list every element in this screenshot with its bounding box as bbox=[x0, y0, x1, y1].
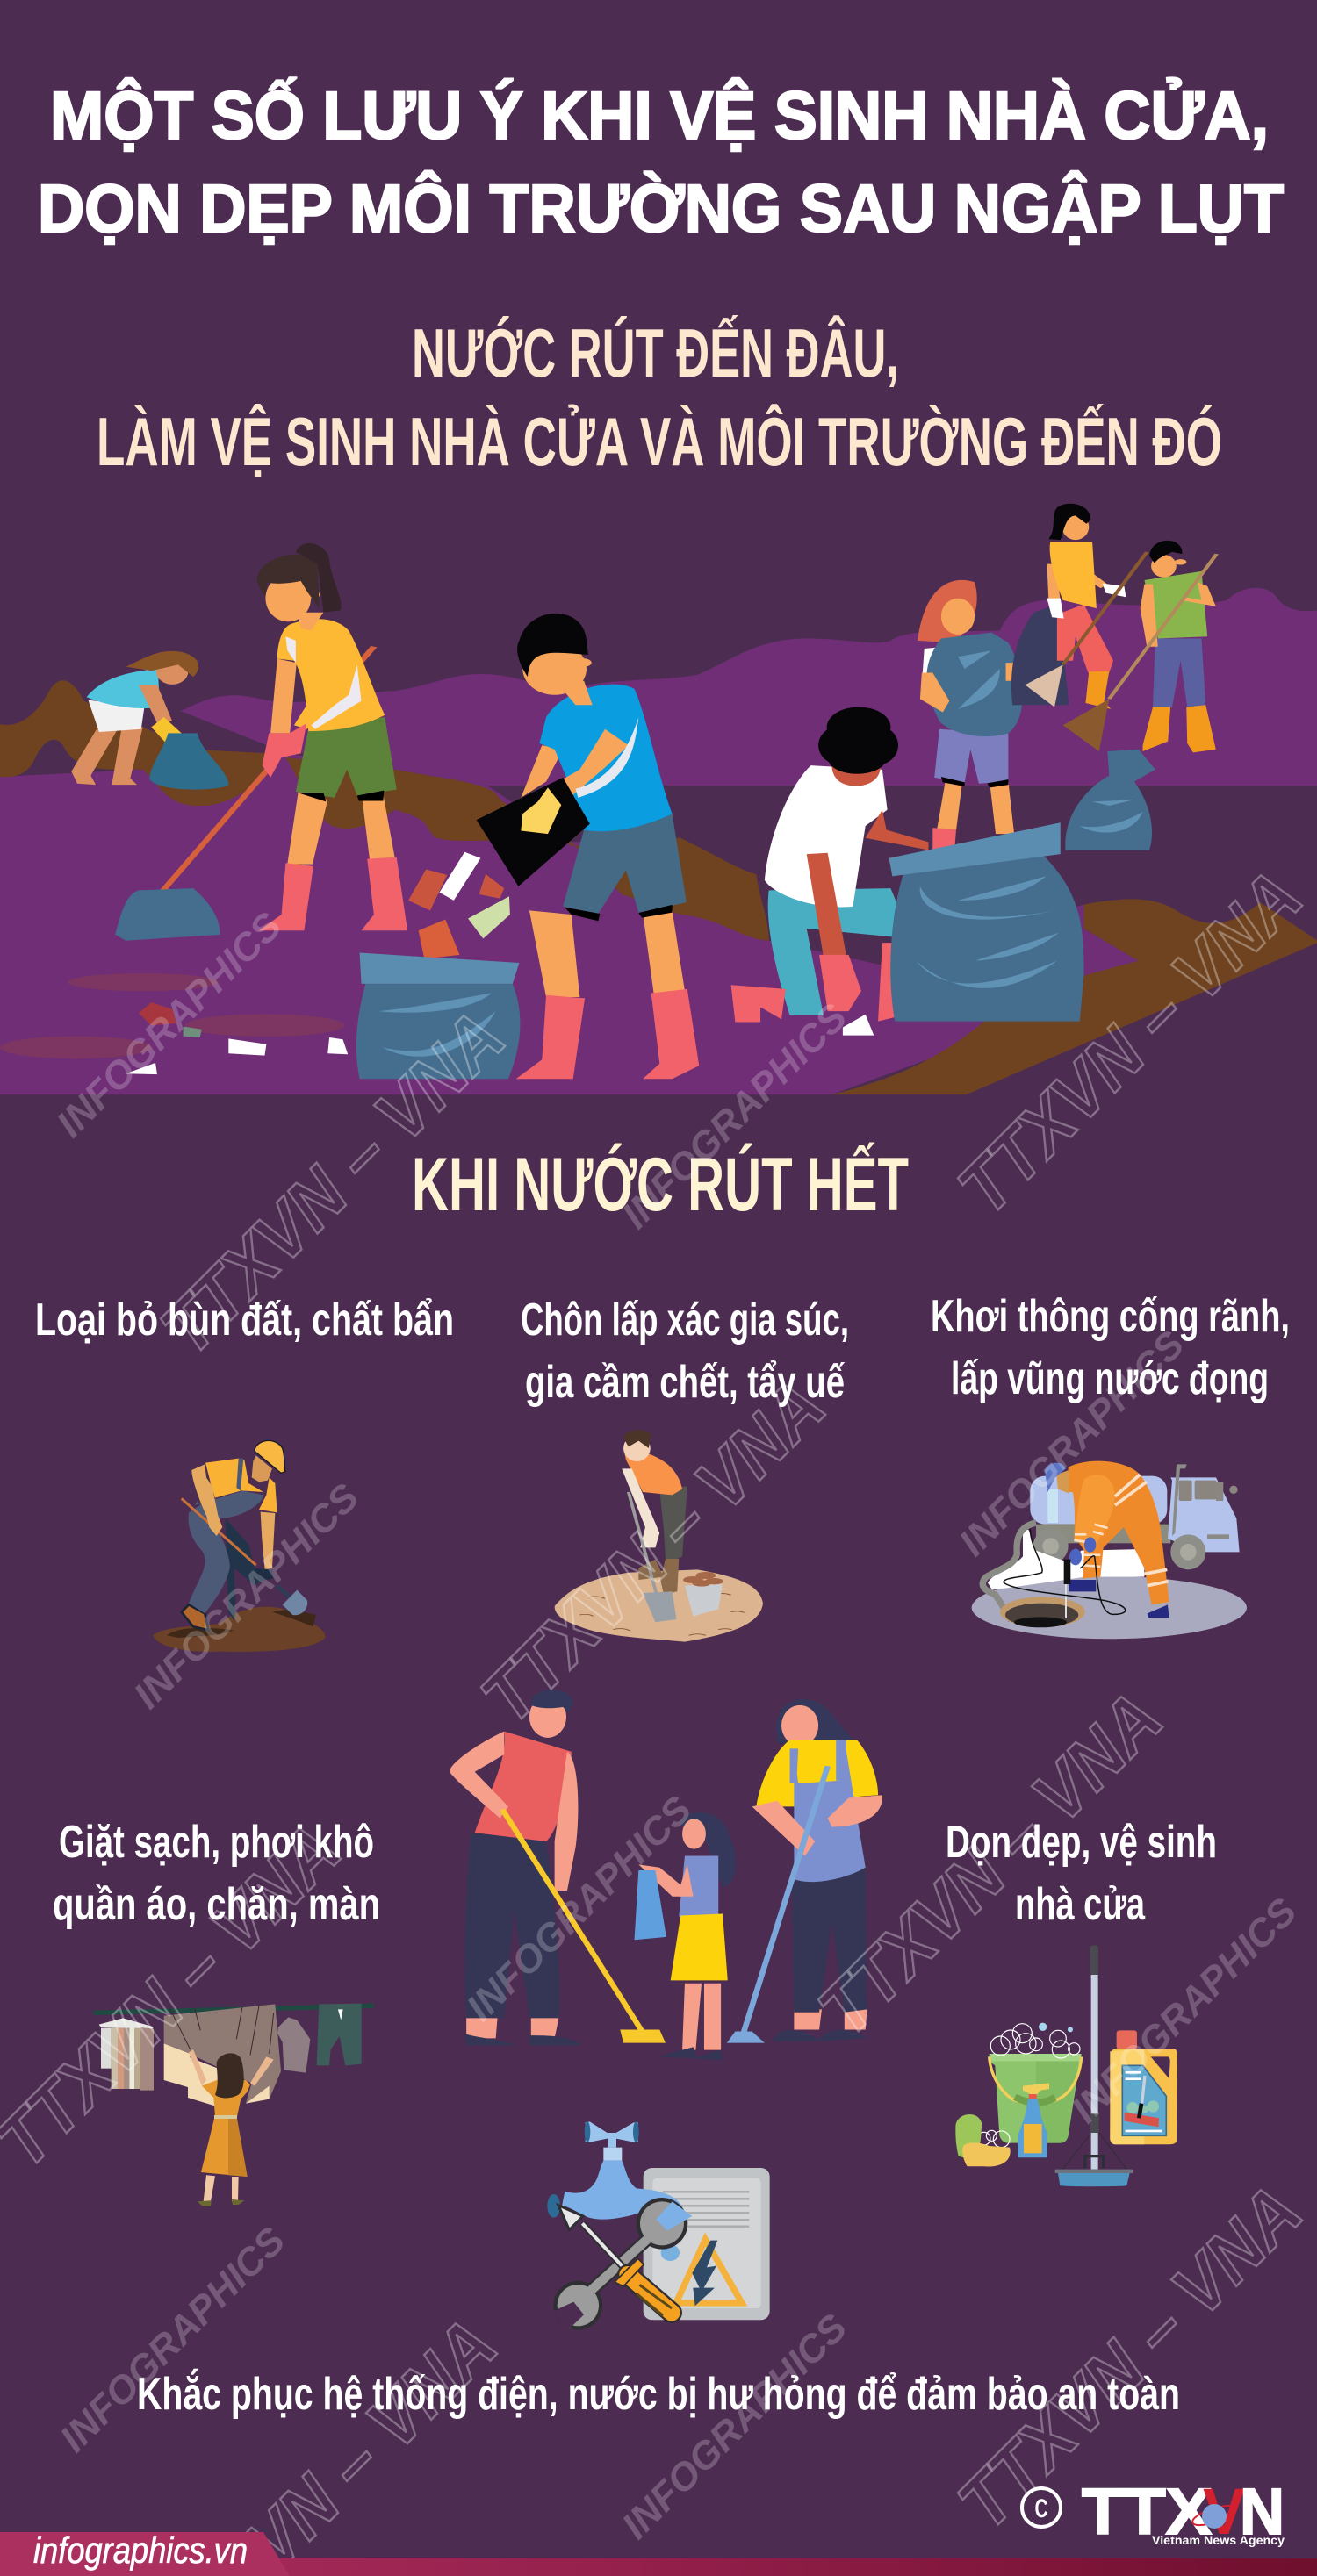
icon: woman hanging laundry bbox=[94, 2004, 374, 2206]
puddles and litter bbox=[0, 973, 348, 1074]
woman in orange shirt, red hair, holding bag bbox=[918, 580, 1023, 850]
item text: wash and dry clothes: Giặt sạch, phơi khô bbox=[59, 1817, 374, 1868]
logo: TTXVN: Vietnam News Agency bbox=[1152, 2533, 1285, 2547]
icon: water tap, wrench, screwdriver and electrical panel bbox=[547, 2121, 770, 2332]
man with mop bbox=[450, 1690, 666, 2045]
far-left child with bag bbox=[71, 651, 228, 790]
mud patches bbox=[0, 680, 1317, 1094]
purple hills bbox=[181, 588, 1317, 786]
subtitle bbox=[97, 314, 1222, 480]
logo: TTXVN: V bbox=[1203, 2475, 1245, 2548]
woman with mop bbox=[727, 1699, 882, 2043]
item text: tidy the house bbox=[946, 1817, 1217, 1930]
logo: TTXVN: TTX bbox=[1082, 2475, 1212, 2548]
watermarks: INFOGRAPHICS bbox=[126, 1475, 367, 1717]
footer website: infographics.vn bbox=[33, 2529, 248, 2571]
item text: bury dead animals: gia cầm chết, tẩy uế bbox=[525, 1357, 845, 1408]
illustration: people cleaning up after the flood bbox=[0, 504, 1317, 1094]
man in green shirt sweeping bbox=[1063, 541, 1217, 752]
watermarks: agency name: TTXVN – VNA bbox=[145, 995, 520, 1370]
icon: worker digging bbox=[153, 1440, 326, 1652]
heading: when water has fully receded: KHI NƯỚC RÚT HẾT bbox=[412, 1143, 909, 1227]
subtitle: NƯỚC RÚT ĐẾN ĐÂU, bbox=[412, 314, 899, 391]
ground bbox=[0, 753, 1139, 1094]
rubbish bag, open bbox=[356, 953, 520, 1079]
copyright symbol bbox=[1022, 2488, 1061, 2527]
girl with cloth bbox=[635, 1812, 737, 2060]
logo: TTXVN: N bbox=[1240, 2475, 1285, 2548]
icon: family cleaning the house bbox=[450, 1690, 882, 2060]
footer strip bbox=[0, 2532, 1317, 2576]
watermarks bbox=[48, 904, 1305, 2547]
icon: worker clearing a manhole beside a truck bbox=[972, 1461, 1247, 1639]
watermarks: INFOGRAPHICS bbox=[458, 1788, 700, 2029]
icon: cleaning supplies bbox=[955, 1946, 1177, 2186]
watermarks: INFOGRAPHICS bbox=[614, 2306, 855, 2547]
falling rubbish bbox=[408, 852, 510, 958]
man in blue shirt with dustpan bbox=[477, 614, 699, 1079]
watermarks: INFOGRAPHICS bbox=[951, 1323, 1192, 1564]
title bbox=[38, 77, 1284, 247]
item text: tidy the house: nhà cửa bbox=[1015, 1879, 1146, 1930]
watermarks: INFOGRAPHICS bbox=[614, 995, 855, 1237]
item text: bury dead animals: Chôn lấp xác gia súc, bbox=[521, 1295, 849, 1345]
item text: remove mud: Loại bỏ bùn đất, chất bẩn bbox=[35, 1295, 454, 1345]
item text: tidy the house: Dọn dẹp, vệ sinh bbox=[946, 1817, 1217, 1868]
tied rubbish bag, right bbox=[1065, 750, 1155, 850]
title: DỌN DẸP MÔI TRƯỜNG SAU NGẬP LỤT bbox=[38, 170, 1284, 247]
item text: clear drains bbox=[931, 1291, 1290, 1404]
item text: wash and dry clothes bbox=[53, 1817, 380, 1930]
logo: TTXVN bbox=[1082, 2475, 1285, 2548]
woman in yellow shirt sweeping bbox=[1011, 504, 1147, 709]
item text: bury dead animals bbox=[521, 1295, 849, 1408]
icon: person with shovel and bucket on a mound bbox=[555, 1430, 763, 1642]
watermarks: agency name: TTXVN – VNA bbox=[802, 1676, 1177, 2051]
watermarks: INFOGRAPHICS bbox=[1063, 1890, 1305, 2131]
kneeling person in white shirt bbox=[731, 707, 928, 1036]
item text: wash and dry clothes: quần áo, chăn, màn bbox=[53, 1879, 380, 1930]
copyright symbol: C bbox=[1034, 2494, 1048, 2523]
watermarks: INFOGRAPHICS bbox=[52, 2219, 293, 2460]
watermarks: agency name bbox=[0, 855, 1317, 2576]
title: MỘT SỐ LƯU Ý KHI VỆ SINH NHÀ CỬA, bbox=[50, 77, 1269, 154]
watermarks: INFOGRAPHICS bbox=[48, 904, 290, 1145]
watermarks: agency name: TTXVN – VNA bbox=[465, 1364, 840, 1739]
large rubbish bag bbox=[889, 822, 1084, 1022]
woman with ponytail and rake bbox=[115, 543, 407, 941]
